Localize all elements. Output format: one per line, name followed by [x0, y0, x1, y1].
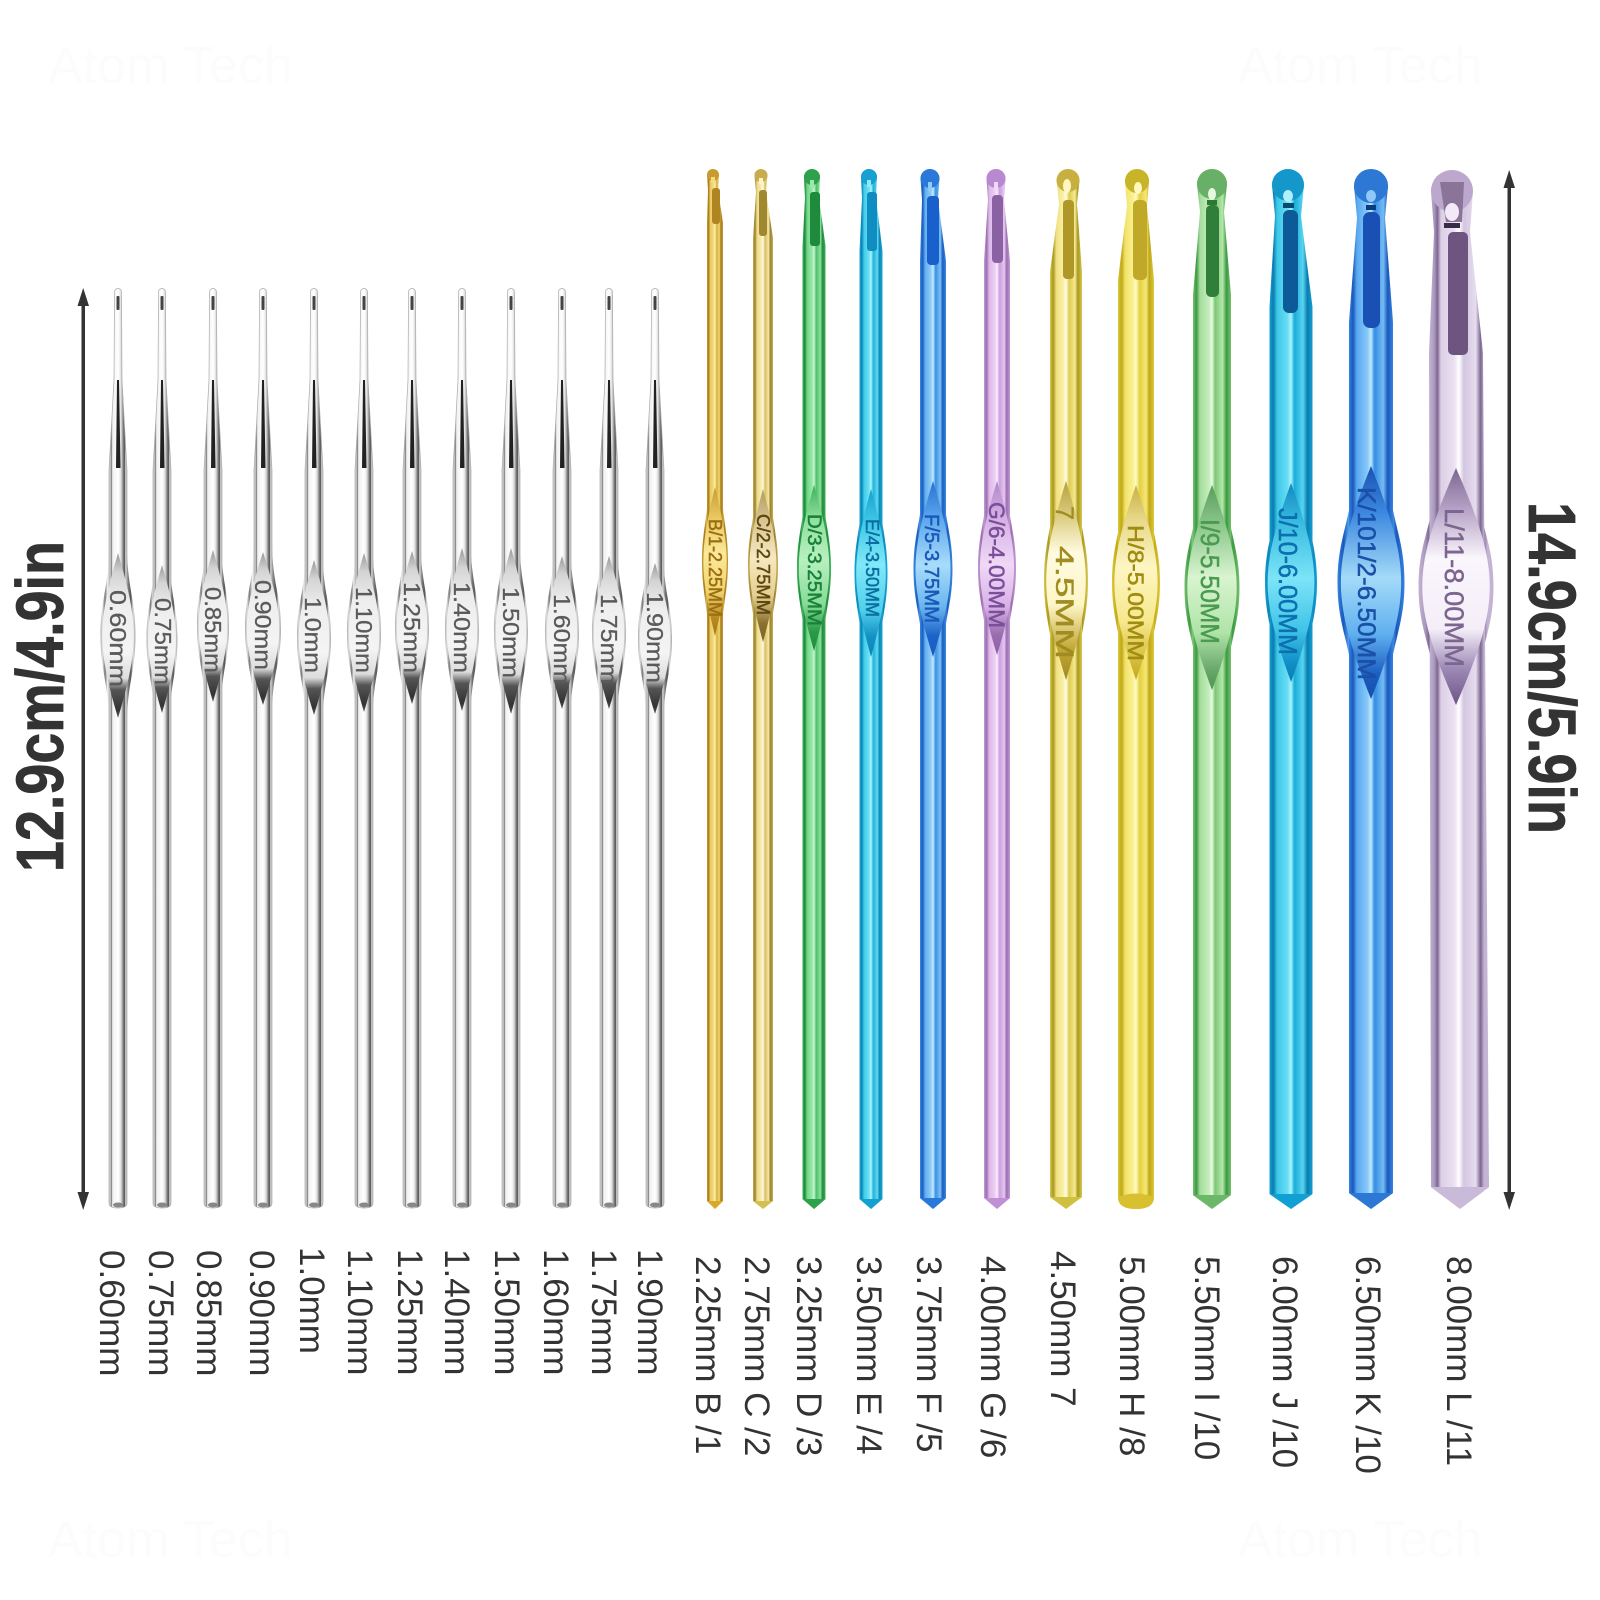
arrow: 12.9cm height [78, 288, 89, 1210]
label: 1.50mm: 1.50mm [487, 1249, 526, 1375]
label: 3.50mm E /4: 3.50mm E /4 [849, 1256, 888, 1454]
hook: D/3 3.25mm green [797, 169, 831, 1209]
hook: F/5 3.75mm blue [914, 169, 952, 1209]
hook: D/3 3.25mm green: D/3-3.25MM [803, 514, 824, 626]
hook: 0.60mm [100, 288, 136, 1208]
hook: F/5 3.75mm blue: F/5-3.75MM [920, 514, 942, 623]
hook: 1.40mm: 1.40mm [449, 582, 475, 673]
label: 2.25mm B /1: 2.25mm B /1 [688, 1256, 727, 1454]
hook: 1.25mm: 1.25mm [399, 582, 425, 673]
label: 3.25mm D /3: 3.25mm D /3 [789, 1256, 828, 1456]
hook: 1.75mm: 1.75mm [596, 594, 622, 684]
hook: 7 4.5mm pale yellow [1044, 169, 1088, 1209]
label: 3.75mm F /5: 3.75mm F /5 [909, 1256, 948, 1452]
hook: 1.0mm: 1.0mm [300, 597, 326, 673]
hook: 1.10mm [347, 288, 381, 1208]
hook: 1.90mm [638, 288, 672, 1208]
hook: I/9 5.50mm light green: I/9-5.50MM [1195, 519, 1225, 644]
label: 1.40mm: 1.40mm [437, 1249, 476, 1375]
hook: 1.50mm: 1.50mm [498, 587, 524, 678]
hook: 0.75mm: 0.75mm [150, 598, 176, 685]
hook: L/11 8.00mm lilac grey: L/11-8.00MM [1439, 508, 1469, 667]
hook: 0.85mm: 0.85mm [200, 587, 226, 673]
hook: 1.0mm [297, 288, 331, 1208]
hook: K/10 1/2 6.50mm blue [1338, 169, 1404, 1209]
hook: 1.75mm [592, 288, 626, 1208]
label: 2.75mm C /2: 2.75mm C /2 [737, 1256, 776, 1456]
hook: 0.60mm: 0.60mm [105, 590, 131, 687]
hook: 1.60mm: 1.60mm [549, 594, 575, 684]
watermarks: Atom Tech [48, 37, 293, 95]
hook: H/8 5.00mm yellow [1112, 169, 1160, 1209]
label: 1.90mm: 1.90mm [630, 1249, 669, 1375]
label: 5.00mm H /8: 5.00mm H /8 [1112, 1256, 1151, 1456]
dimension label: 12.9cm/4.9in: 12.9cm/4.9in [3, 541, 78, 872]
label: 4.00mm G /6: 4.00mm G /6 [973, 1256, 1012, 1458]
label: 6.00mm J /10: 6.00mm J /10 [1265, 1256, 1304, 1468]
hook: 0.85mm [197, 288, 229, 1208]
hook: 1.50mm [494, 288, 528, 1208]
hook: 1.60mm [545, 288, 579, 1208]
label: 1.0mm: 1.0mm [292, 1247, 331, 1354]
hook: K/10 1/2 6.50mm blue: K/101/2-6.50MM [1352, 487, 1380, 680]
hook: 0.75mm [146, 288, 178, 1208]
label: 8.00mm L /11: 8.00mm L /11 [1439, 1256, 1478, 1466]
hook: 7 4.5mm pale yellow: 7 [1050, 506, 1078, 520]
hook: 7 4.5mm pale yellow: 4.5MM [1050, 546, 1078, 659]
dimension label: 14.9cm/5.9in: 14.9cm/5.9in [1514, 502, 1589, 834]
hook: 1.10mm: 1.10mm [351, 587, 377, 673]
hook: J/10 6.00mm cyan [1265, 169, 1317, 1209]
hook: 0.90mm [245, 288, 281, 1208]
label: 1.75mm: 1.75mm [584, 1249, 623, 1375]
hook: I/9 5.50mm light green [1184, 169, 1240, 1209]
hook: 1.25mm [395, 288, 429, 1208]
watermarks: Atom Tech [48, 1511, 293, 1569]
hook: G/6 4.00mm lilac [978, 169, 1016, 1209]
label: 0.60mm: 0.60mm [92, 1250, 131, 1376]
label: 4.50mm 7: 4.50mm 7 [1043, 1251, 1082, 1407]
size labels [92, 1247, 1478, 1474]
silver hooks [100, 288, 672, 1208]
label: 1.10mm: 1.10mm [340, 1249, 379, 1375]
hook: C/2 2.75mm pale gold [748, 169, 778, 1209]
watermarks: Atom Tech [1238, 1511, 1483, 1569]
hook: L/11 8.00mm lilac grey [1418, 170, 1494, 1209]
hook: 0.90mm: 0.90mm [250, 580, 276, 670]
hook: E/4 3.50mm cyan: E/4-3.50MM [862, 519, 882, 617]
label: 0.90mm: 0.90mm [242, 1250, 281, 1376]
hook: H/8 5.00mm yellow: H/8-5.00MM [1123, 525, 1148, 661]
label: 0.75mm: 0.75mm [141, 1250, 180, 1376]
hook: E/4 3.50mm cyan [854, 169, 888, 1209]
coloured hooks [702, 169, 1494, 1209]
label: 6.50mm K /10: 6.50mm K /10 [1348, 1256, 1387, 1474]
hook: G/6 4.00mm lilac: G/6-4.00MM [984, 502, 1009, 628]
label: 5.50mm I /10: 5.50mm I /10 [1187, 1256, 1226, 1460]
hook: C/2 2.75mm pale gold: C/2-2.75MM [753, 514, 773, 615]
hook: B/1 2.25mm gold: B/1-2.25MM [705, 519, 725, 617]
arrow: 14.9cm height [1504, 170, 1515, 1210]
watermarks: Atom Tech [1238, 37, 1483, 95]
label: 1.60mm: 1.60mm [536, 1249, 575, 1375]
hook: 1.90mm: 1.90mm [642, 592, 668, 683]
hook: 1.40mm [445, 288, 479, 1208]
hook: B/1 2.25mm gold [702, 169, 728, 1209]
hook: J/10 6.00mm cyan: J/10-6.00MM [1273, 508, 1303, 655]
label: 0.85mm: 0.85mm [189, 1250, 228, 1376]
label: 1.25mm: 1.25mm [390, 1249, 429, 1375]
